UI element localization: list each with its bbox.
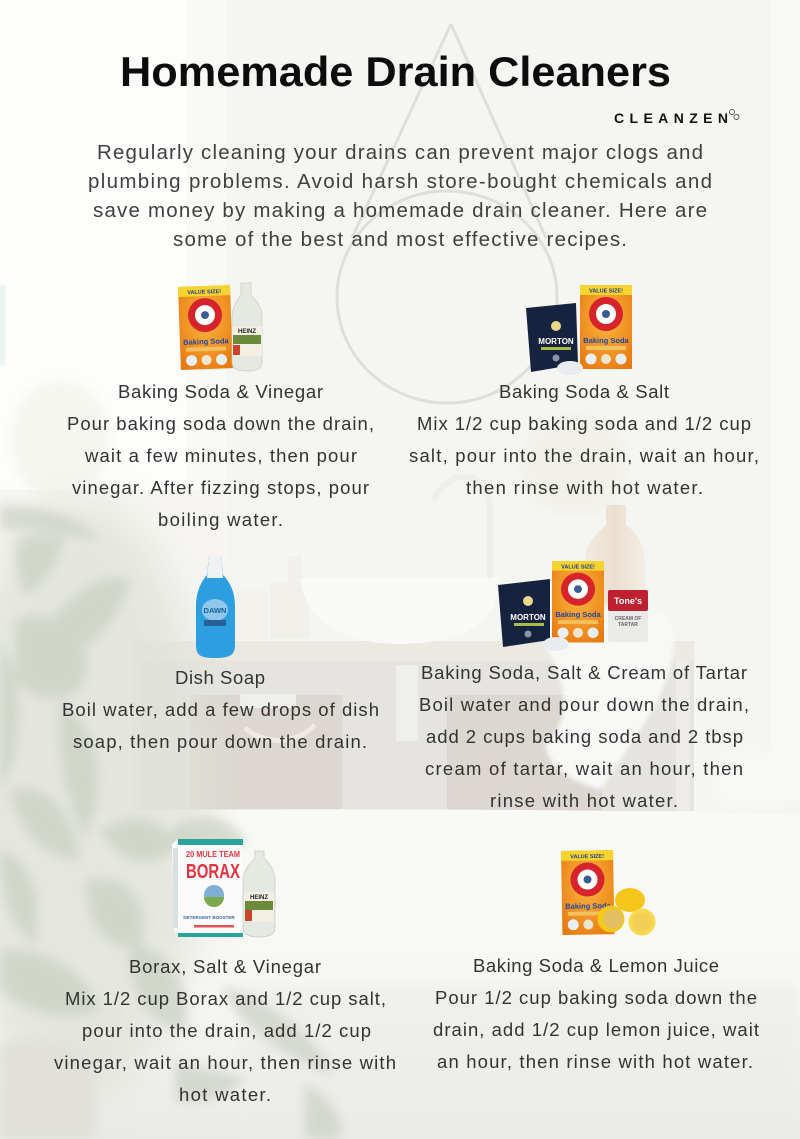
icon: borax box: DETERGENT BOOSTER — [183, 915, 235, 920]
label: cream of tartar recipe text: rinse with hot water. — [490, 790, 678, 811]
icon: cream of tartar tin: CREAM OF — [615, 616, 641, 622]
label: lemon recipe text: Baking Soda & Lemon Juice — [473, 955, 719, 976]
icon: dish soap bottle: DAWN — [204, 606, 226, 615]
panel: baking soda and salt — [409, 285, 759, 498]
plant haze — [0, 500, 210, 1100]
bathtub — [0, 809, 800, 1139]
label: cream of tartar recipe text — [419, 662, 749, 811]
icon: salt box: MORTON — [510, 613, 546, 622]
label: baking soda and salt text: salt, pour into the drain, wait an hour, — [409, 445, 759, 466]
icon: salt box — [526, 303, 578, 372]
icon: baking soda box — [178, 285, 233, 370]
logo: Cleanzen: CLEANZEN — [614, 110, 728, 126]
label: cream of tartar recipe text: Boil water and pour down the drain, — [419, 694, 749, 715]
counter and cabinet — [132, 641, 694, 661]
icon: baking soda box: Baking Soda — [183, 336, 230, 347]
icon: salt box — [498, 579, 550, 647]
label: cream of tartar recipe text: cream of tartar, wait an hour, then — [425, 758, 743, 779]
label: baking soda and vinegar text: Pour baking soda down the drain, — [67, 413, 374, 434]
icon: vinegar bottle — [243, 851, 275, 937]
icon: baking soda box: Baking Soda — [583, 336, 630, 345]
label: baking soda and vinegar text: vinegar. After fizzing stops, pour — [72, 477, 369, 498]
icon: salt pile — [557, 361, 583, 375]
label: borax recipe text: vinegar, wait an hour, then rinse with — [54, 1052, 396, 1073]
basins — [300, 578, 500, 644]
label: lemon recipe text: an hour, then rinse with hot water. — [437, 1051, 753, 1072]
label: dish soap text — [62, 667, 379, 752]
pipe — [396, 665, 418, 741]
icon: baking soda box: Baking Soda — [565, 901, 612, 911]
mirror — [337, 24, 557, 403]
panel: baking soda and vinegar — [67, 283, 374, 530]
label: cream of tartar recipe text: add 2 cups baking soda and 2 tbsp — [426, 726, 743, 747]
icon: baking soda box: Baking Soda — [555, 610, 602, 619]
faucet — [434, 477, 490, 580]
panel: baking soda, salt and cream of tartar — [419, 561, 749, 811]
icon: salt box: MORTON — [538, 337, 574, 346]
label: borax recipe text: hot water. — [179, 1084, 271, 1105]
label: borax recipe text: pour into the drain, add 1/2 cup — [82, 1020, 371, 1041]
intro text — [88, 141, 712, 251]
panel: borax, salt and vinegar — [54, 839, 396, 1105]
intro text: save money by making a homemade drain cleaner. Here are — [93, 199, 707, 222]
icon: cream of tartar tin — [608, 590, 648, 642]
dried flowers — [10, 380, 630, 515]
icon: vinegar bottle — [232, 283, 262, 371]
intro text: plumbing problems. Avoid harsh store-bought chemicals and — [88, 170, 712, 193]
label: lemon recipe text: drain, add 1/2 cup lemon juice, wait — [433, 1019, 759, 1040]
icon: salt pile — [543, 637, 569, 651]
label: borax recipe text — [54, 956, 396, 1105]
plant shadow — [0, 505, 341, 1139]
label: lemon recipe text — [433, 955, 759, 1072]
icon: lemons — [598, 888, 656, 936]
towel — [545, 604, 674, 790]
panel: dish soap — [62, 556, 379, 752]
label: borax recipe text: Mix 1/2 cup Borax and 1/2 cup salt, — [65, 988, 386, 1009]
icon: vinegar bottle: HEINZ — [250, 895, 268, 901]
label: cream of tartar recipe text: Baking Soda, Salt & Cream of Tartar — [421, 662, 747, 683]
icon: vinegar bottle: HEINZ — [238, 329, 256, 335]
icon: cream of tartar tin: Tone's — [614, 596, 642, 606]
icon: baking soda box: VALUE SIZE! — [561, 564, 595, 570]
icon: baking soda box: VALUE SIZE! — [187, 289, 221, 296]
icon: borax box: BORAX — [186, 861, 240, 883]
icon: borax box: 20 MULE TEAM — [186, 850, 240, 859]
baskets — [190, 695, 342, 811]
icon: baking soda box — [580, 285, 632, 369]
vase — [585, 505, 645, 640]
icon: baking soda box: VALUE SIZE! — [589, 288, 623, 294]
label: dish soap text: Dish Soap — [175, 667, 265, 688]
icon: cream of tartar tin: TARTAR — [618, 622, 638, 628]
label: lemon recipe text: Pour 1/2 cup baking soda down the — [435, 987, 757, 1008]
label: baking soda and vinegar text: Baking Soda & Vinegar — [118, 381, 323, 402]
label: dish soap text: Boil water, add a few drops of dish — [62, 699, 379, 720]
icon: dish soap bottle — [196, 556, 235, 658]
label: baking soda and vinegar text: boiling water. — [158, 509, 283, 530]
label: baking soda and salt text: then rinse with hot water. — [466, 477, 703, 498]
cups and soap — [236, 590, 268, 640]
label: baking soda and salt text: Mix 1/2 cup baking soda and 1/2 cup — [417, 413, 751, 434]
label: dish soap text: soap, then pour down the drain. — [73, 731, 367, 752]
label: baking soda and salt text: Baking Soda & Salt — [499, 381, 669, 402]
icon: baking soda box — [561, 850, 614, 935]
intro text: Regularly cleaning your drains can prevent major clogs and — [97, 141, 703, 164]
panel: baking soda and lemon juice — [433, 850, 759, 1072]
icon: baking soda box: VALUE SIZE! — [570, 854, 604, 860]
icon: borax box — [172, 839, 243, 937]
title: Homemade Drain Cleaners — [120, 48, 671, 95]
label: baking soda and vinegar text — [67, 381, 374, 530]
intro text: some of the best and most effective recipes. — [173, 228, 627, 251]
label: baking soda and salt text — [409, 381, 759, 498]
label: borax recipe text: Borax, Salt & Vinegar — [129, 956, 321, 977]
icon: baking soda box — [552, 561, 604, 642]
label: baking soda and vinegar text: wait a few minutes, then pour — [84, 445, 357, 466]
